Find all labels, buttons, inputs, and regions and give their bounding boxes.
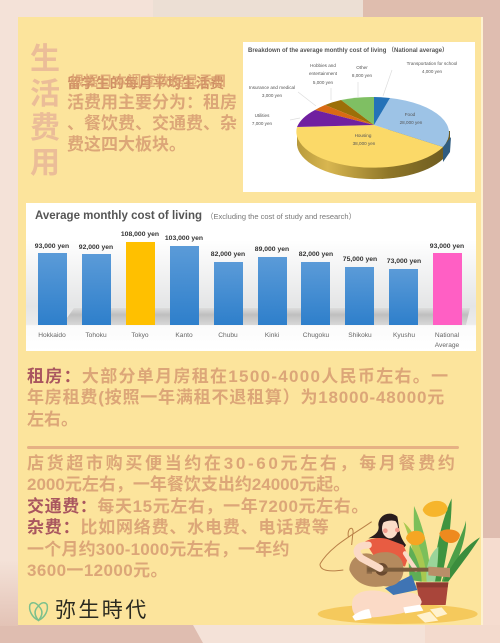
pie labels: Insurance and medical [249, 85, 295, 90]
flowers [406, 501, 460, 545]
bar labels: Hokkaido [38, 332, 66, 339]
bar labels: Tohoku [85, 332, 107, 339]
text block: food, transport, misc: 一个月约300-1000元左右，一年约 [27, 540, 290, 559]
pie labels: 4,000 yen [422, 69, 443, 74]
text block: rent: 租房：大部分单月房租在1500-4000人民币左右。一 [27, 367, 449, 386]
bar labels: Tokyo [131, 332, 149, 339]
text block: rent: 左右。 [27, 410, 78, 429]
back hair [368, 514, 406, 549]
text block: food, transport, misc: 3600一12000元。 [27, 561, 168, 580]
pie labels: Food [405, 112, 416, 117]
text block: overlapping intro line: 留学生的每月平均生活费 [67, 75, 224, 91]
text block: overlapping intro line: 根据日本调查数据显示日 [70, 73, 227, 89]
text block: rent: 年房租费(按照一年满租不退租算）为18000-48000元 [27, 388, 445, 407]
bar values: 103,000 yen [165, 235, 203, 242]
bar values: 82,000 yen [211, 251, 245, 258]
face [382, 518, 398, 538]
guitar body [349, 552, 404, 587]
text block: food, transport, misc: 杂费：比如网络费、水电费、电话费等 [27, 518, 330, 537]
text block: intro [67, 93, 237, 154]
bar values: 75,000 yen [343, 256, 377, 263]
panel: bar chart: （Excluding the cost of study and research） [206, 212, 356, 221]
bar values [35, 231, 464, 265]
text block: food, transport, misc: 店货超市购买便当约在30-60元左右，每月餐费约 [27, 454, 458, 473]
bar labels: Average [435, 342, 460, 349]
illustration: girl playing guitar with tulips [318, 498, 480, 624]
pie labels: Housing [355, 133, 372, 138]
bar values: 82,000 yen [299, 251, 333, 258]
bar labels: Chugoku [303, 332, 330, 339]
flower pot [416, 582, 448, 605]
logo: heart and brand name [28, 599, 149, 622]
text block: intro: 、餐饮费、交通费、杂 [67, 114, 237, 133]
torso [365, 538, 408, 567]
music notes [320, 522, 372, 571]
chart title: Average monthly cost of living [35, 210, 202, 222]
pie labels [249, 61, 457, 146]
shorts [385, 575, 417, 595]
bar values: 73,000 yen [387, 258, 421, 265]
divider [27, 446, 459, 449]
bar values: 93,000 yen [35, 243, 69, 250]
pie labels: 7,000 yen [252, 121, 273, 126]
bar labels: Shikoku [348, 332, 372, 339]
text block: rent [27, 367, 449, 429]
text block: intro: 活费用主要分为：租房 [67, 93, 237, 112]
pie labels: 38,000 yen [353, 141, 376, 146]
pie labels: Other [356, 65, 368, 70]
text block: food, transport, misc: 2000元左右，一年餐饮支出约24000元起。 [27, 475, 350, 494]
guitar neck [367, 568, 429, 572]
chart title: Breakdown of the average monthly cost of living （National average） [248, 47, 448, 54]
pie chart [296, 97, 451, 179]
papers [417, 612, 438, 623]
bars [38, 242, 462, 325]
text block: intro: 费这四大板块。 [67, 135, 186, 154]
pie labels: 3,000 yen [262, 93, 283, 98]
bar values: 93,000 yen [430, 243, 464, 250]
pie labels: Transportation for school [407, 61, 457, 66]
bar labels: Chubu [218, 332, 238, 339]
shoes [352, 609, 372, 621]
heading: vertical title [30, 43, 60, 180]
panel: bar chart [26, 203, 476, 351]
heading: vertical title: 费 [30, 112, 60, 145]
bar labels: Kanto [175, 332, 193, 339]
pie labels: entertainment [309, 71, 338, 76]
bar values: 89,000 yen [255, 246, 289, 253]
pie labels: 28,000 yen [400, 120, 423, 125]
text block: food, transport, misc: 交通费：每天15元左右，一年7200元左右。 [27, 497, 369, 516]
heading: vertical title: 活 [30, 78, 60, 110]
panel: pie chart [243, 42, 475, 192]
heading: vertical title: 用 [30, 146, 60, 180]
icon: green heart leaf [28, 602, 48, 622]
left arm [357, 545, 380, 568]
plant leaves [403, 498, 480, 582]
ground ellipse [318, 604, 478, 624]
bar labels: Kyushu [393, 332, 415, 339]
legs [352, 591, 422, 617]
bar labels [38, 332, 460, 349]
bar values: 92,000 yen [79, 244, 113, 251]
pie labels: 8,000 yen [352, 73, 373, 78]
heading: vertical title: 生 [30, 43, 60, 76]
pie labels: Utilities [255, 113, 270, 118]
person [349, 514, 450, 623]
bar values: 108,000 yen [121, 231, 159, 238]
pie labels: Hobbies and [310, 63, 336, 68]
pie labels: 5,000 yen [313, 80, 334, 85]
brand name: 弥生時代 [55, 599, 149, 622]
text block: food, transport, misc [27, 454, 458, 580]
right arm [405, 553, 416, 570]
bar labels: National [435, 332, 460, 339]
bar labels: Kinki [265, 332, 280, 339]
